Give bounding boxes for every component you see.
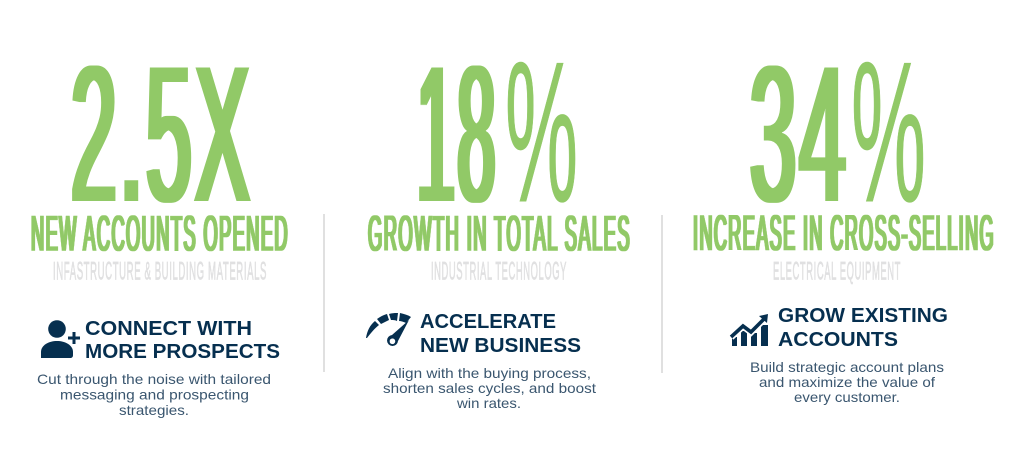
icon: speedometer [366, 313, 411, 346]
stat: 34%: 34 [750, 26, 849, 243]
description: connect [37, 371, 271, 418]
panel: new accounts [31, 26, 289, 418]
heading: grow existing accounts: GROW EXISTING [778, 304, 948, 327]
heading: grow existing accounts [778, 304, 948, 351]
description: accelerate: shorten sales cycles, and boost [383, 380, 596, 396]
description: grow: and maximize the value of [759, 374, 935, 390]
panel: total sales [366, 21, 631, 411]
panel: cross-selling [693, 21, 995, 405]
heading: accelerate new business [420, 310, 581, 357]
description: grow: every customer. [794, 389, 900, 405]
description: accelerate: Align with the buying process, [388, 365, 591, 381]
panel: total sales: % [505, 21, 578, 244]
heading: connect with more prospects: CONNECT WITH [85, 317, 252, 340]
panel: cross-selling: % [851, 21, 926, 244]
stat: 18% [417, 21, 578, 244]
panel: new accounts: 2.5X [71, 26, 253, 243]
heading: accelerate new business: NEW BUSINESS [420, 334, 581, 357]
icon: person with plus [41, 320, 80, 358]
description: connect: messaging and prospecting [60, 386, 249, 402]
heading: accelerate new business: ACCELERATE [420, 310, 556, 333]
description: grow: Build strategic account plans [750, 359, 944, 375]
description: connect: strategies. [119, 402, 189, 418]
description: connect: Cut through the noise with tailored [37, 371, 271, 387]
text: NEW ACCOUNTS OPENED [31, 206, 289, 262]
stat: 18%: 18 [417, 26, 498, 243]
heading: connect with more prospects [85, 317, 280, 363]
description: grow [750, 359, 944, 405]
icon: growth chart [731, 314, 768, 346]
description: accelerate [383, 365, 596, 411]
description: accelerate: win rates. [456, 395, 521, 411]
panel: total sales: INDUSTRIAL TECHNOLOGY [431, 258, 567, 286]
text: INFASTRUCTURE & BUILDING MATERIALS [53, 258, 267, 286]
heading: connect with more prospects: MORE PROSPECTS [85, 340, 280, 363]
heading: grow existing accounts: ACCOUNTS [778, 328, 898, 351]
